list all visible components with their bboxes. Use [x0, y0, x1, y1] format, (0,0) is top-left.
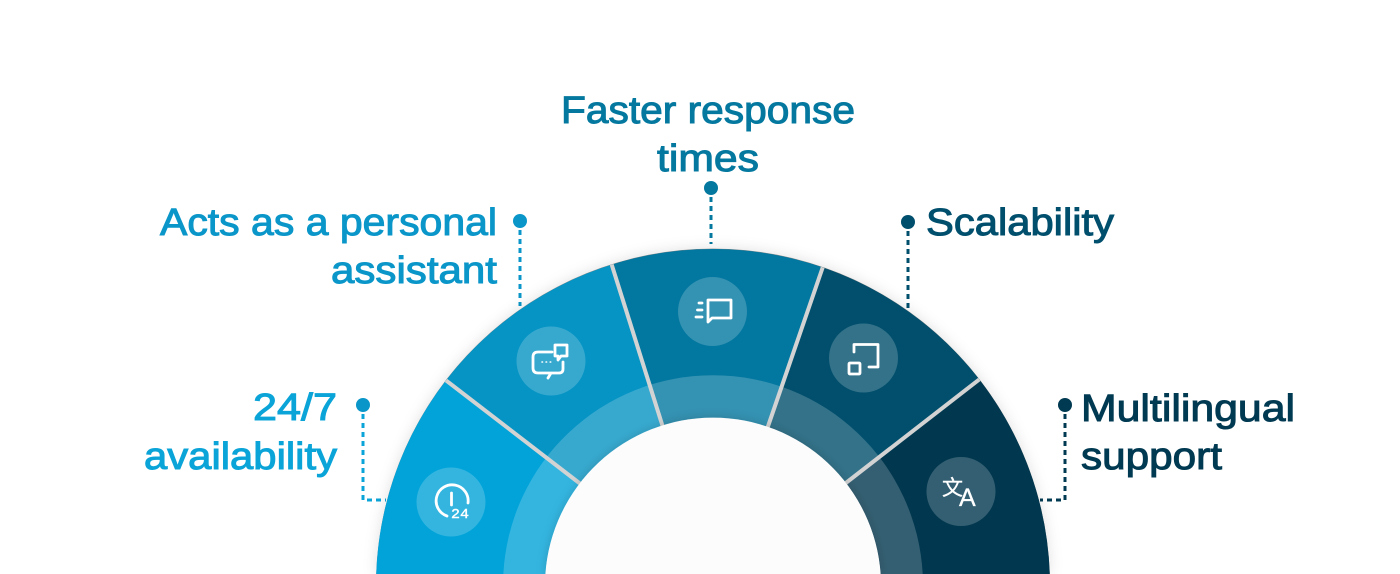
connector: scalability: [901, 215, 915, 308]
icon: translate: 文: [942, 472, 963, 502]
label: faster response times: [561, 90, 855, 180]
label: multilingual support: support: [1081, 436, 1222, 478]
segment: faster response: [612, 249, 823, 427]
icon: resize squares: [829, 324, 898, 392]
segment: scalability: [768, 267, 979, 483]
segment: personal assistant: [446, 265, 662, 484]
connector: 24/7 availability: [356, 398, 386, 500]
label: acts as a personal assistant: assistant: [331, 250, 497, 292]
label: faster response times: Faster response: [561, 90, 855, 132]
label: acts as a personal assistant: Acts as a personal: [160, 202, 497, 244]
label: 24/7 availability: 24/7: [253, 387, 337, 429]
inner white circle: [545, 418, 881, 574]
connector: personal assistant: [513, 214, 527, 306]
segment: multilingual: [846, 379, 1050, 574]
icon: chat bubbles: [516, 326, 586, 396]
label: 24/7 availability: [144, 387, 337, 478]
inner lighter ring: [503, 375, 923, 574]
label: acts as a personal assistant: [160, 202, 497, 292]
segment: 24/7 availability: [376, 380, 580, 574]
icon: clock 24: 24: [451, 507, 469, 523]
icon: fast message: [678, 277, 747, 346]
label: scalability: Scalability: [926, 202, 1114, 244]
icon: translate: A: [959, 484, 976, 512]
icon: translate: [926, 457, 996, 526]
connector: faster response: [704, 181, 718, 244]
wheel shadow: [376, 249, 1050, 574]
semicircle wheel: [376, 249, 1050, 574]
label: multilingual support: Multilingual: [1081, 388, 1295, 430]
label: faster response times: times: [657, 138, 759, 180]
icon: clock 24: [416, 468, 486, 536]
label: 24/7 availability: availability: [144, 436, 337, 478]
connector: multilingual: [1040, 398, 1072, 500]
label: multilingual support: [1081, 388, 1295, 478]
segment separators: [446, 265, 979, 484]
